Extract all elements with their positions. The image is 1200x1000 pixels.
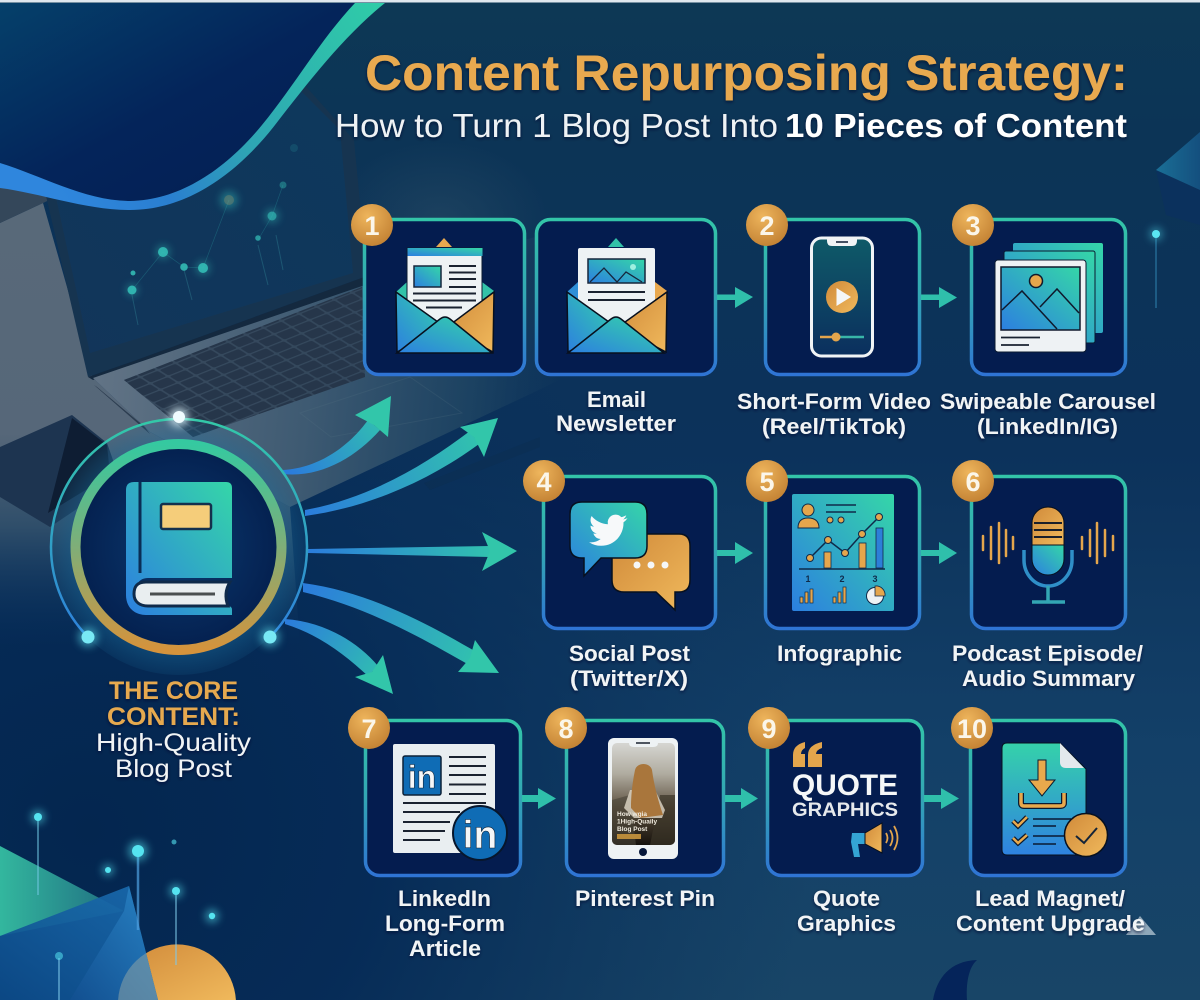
icon: quote graphics wordmark: GRAPHICS <box>792 799 898 821</box>
icon: linkedin article page: in <box>408 759 436 795</box>
number badges: 3 <box>965 211 981 241</box>
icon: phone with play button <box>812 238 872 356</box>
icon: book <box>126 482 232 615</box>
icon: open envelope with article <box>396 238 494 353</box>
card labels: (Twitter/X) <box>570 666 688 691</box>
card 3: swipeable carousel <box>972 220 1126 374</box>
card labels: Newsletter <box>556 411 676 436</box>
icon: quote graphics wordmark: QUOTE <box>792 769 898 802</box>
card labels: Podcast Episode/ <box>952 641 1143 666</box>
card 6: podcast <box>972 476 1126 628</box>
card labels: Short-Form Video <box>737 389 931 414</box>
core content caption: Blog Post <box>115 755 232 783</box>
card labels: Quote <box>813 886 880 911</box>
icon: infographic sheet: 3 <box>872 574 878 584</box>
icon: phone with photo pin <box>608 738 678 859</box>
title: 10 Pieces of Content <box>785 107 1127 144</box>
big arrow 5 <box>285 619 393 694</box>
decorative right side shapes <box>933 132 1200 1000</box>
big arrow 3 <box>308 532 517 571</box>
icon: infographic sheet: 1 <box>805 574 811 584</box>
number badges: 9 <box>761 714 777 744</box>
icon: quote graphics wordmark <box>792 742 898 857</box>
icon: microphone with sound waves <box>983 507 1113 602</box>
card 2: short-form video <box>766 220 920 374</box>
number badges: 6 <box>965 467 981 497</box>
core content caption <box>96 677 252 783</box>
card labels: Email <box>587 387 646 412</box>
icon: phone with photo pin: Blog Post <box>617 826 648 833</box>
card 5: infographic <box>766 476 920 628</box>
number badges: 5 <box>759 467 775 497</box>
card: email newsletter <box>536 220 716 374</box>
number badges: 7 <box>361 714 377 744</box>
core content caption: THE CORE <box>109 677 238 705</box>
big arrow 1 <box>283 396 391 475</box>
laptop screen chart glow <box>126 144 298 325</box>
title: How to Turn 1 Blog Post Into <box>335 107 778 144</box>
card labels: (LinkedIn/IG) <box>977 414 1118 439</box>
bottom-left decoration <box>0 810 236 1000</box>
icon: phone with photo pin: 1High-Quaily <box>617 818 657 826</box>
card labels: (Reel/TikTok) <box>762 414 906 439</box>
number badges: 2 <box>759 211 775 241</box>
core content circle <box>50 407 307 675</box>
icon: open envelope with image <box>567 238 667 353</box>
icon: phone with photo pin: How wgia <box>617 811 647 818</box>
icon: infographic sheet <box>792 494 894 611</box>
card labels: Lead Magnet/ <box>975 886 1125 911</box>
card labels: Social Post <box>569 641 691 666</box>
title <box>335 45 1128 144</box>
core content caption: High-Quality <box>96 729 252 757</box>
laptop photo background <box>0 87 514 598</box>
card labels <box>385 387 1156 961</box>
number badges: 1 <box>364 211 380 241</box>
icon: linkedin article page: in <box>463 814 497 857</box>
card labels: Graphics <box>797 911 896 936</box>
connector arrows <box>522 287 959 809</box>
icon: linkedin article page <box>393 744 507 860</box>
card 4: social post <box>544 476 716 628</box>
big arrow 2 <box>305 418 498 516</box>
card 8: pinterest pin <box>566 720 724 876</box>
icon: stacked image cards <box>995 243 1103 352</box>
number badges: 4 <box>536 467 552 497</box>
title: Content Repurposing Strategy: <box>365 45 1128 101</box>
icon: speech bubbles with bird <box>570 502 690 610</box>
card 10: lead magnet <box>970 720 1126 876</box>
card labels: Pinterest Pin <box>575 886 715 911</box>
card labels: Infographic <box>777 641 902 666</box>
card labels: Audio Summary <box>962 666 1136 691</box>
big arrow 4 <box>303 583 499 673</box>
number badges: 10 <box>957 714 987 744</box>
number badges: 8 <box>558 714 574 744</box>
card 9: quote graphics <box>768 720 922 876</box>
icon: document with download arrow and check <box>1002 743 1108 856</box>
number badges <box>348 204 994 749</box>
top-left wave <box>0 0 1200 210</box>
card 1: newsletter envelope <box>364 220 524 374</box>
icon: infographic sheet: 2 <box>839 574 845 584</box>
card labels: Long-Form <box>385 911 505 936</box>
card labels: Content Upgrade <box>956 911 1145 936</box>
card labels: Article <box>409 936 481 961</box>
card labels: LinkedIn <box>398 886 491 911</box>
core content caption: CONTENT: <box>107 703 240 731</box>
card 7: linkedin article <box>366 720 520 876</box>
card labels: Swipeable Carousel <box>940 389 1156 414</box>
